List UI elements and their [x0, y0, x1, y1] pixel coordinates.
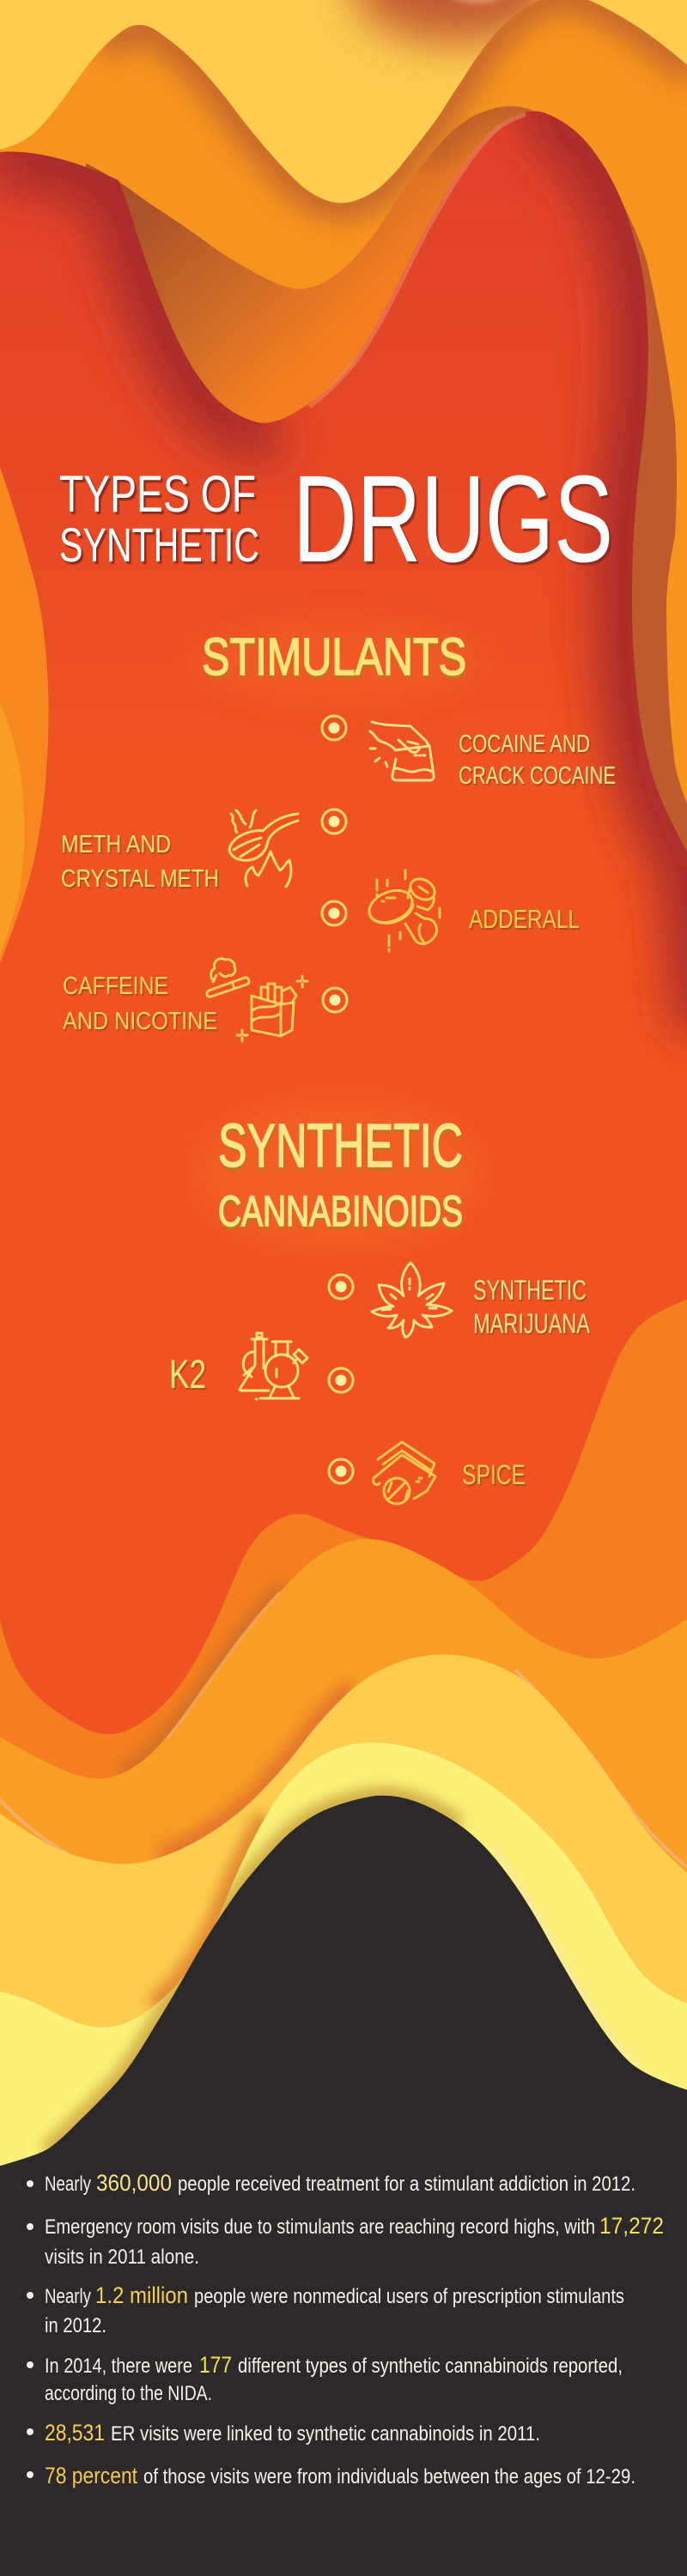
heading: synthetic cannabinoids: CANNABINOIDS: [218, 1187, 463, 1235]
bullet 4: cannabinoid types: different types of synthetic cannabinoids reported,: [238, 2355, 623, 2378]
bullet 3: nonmedical users: Nearly: [45, 2285, 91, 2308]
label: caffeine: AND NICOTINE: [63, 1008, 217, 1035]
marker: meth: [322, 809, 346, 833]
label: spice: SPICE: [462, 1459, 526, 1490]
label: caffeine: CAFFEINE: [63, 973, 168, 1000]
bullet 5: ER visits: 28,531: [45, 2420, 105, 2446]
label: k2: K2: [169, 1351, 206, 1397]
icon: cannabis leaf: [372, 1263, 452, 1337]
panel: stimulants list: [61, 716, 616, 1041]
label: adderall: ADDERALL: [469, 904, 580, 934]
bullet 1: treatment: 360,000: [96, 2170, 172, 2196]
label: meth: CRYSTAL METH: [61, 865, 219, 893]
bullet 4: cannabinoid types: In 2014, there were: [45, 2355, 192, 2378]
label: meth: METH AND: [61, 831, 171, 858]
marker: k2: [329, 1368, 353, 1392]
icon: glass bongs: [240, 1333, 307, 1399]
icon: cigarette and pack: [207, 959, 307, 1041]
panel: statistics list: [27, 2170, 664, 2488]
label: meth: [61, 831, 219, 893]
label: cocaine: CRACK COCAINE: [459, 762, 616, 790]
label: cocaine: COCAINE AND: [459, 730, 590, 758]
marker: synthetic marijuana: [329, 1275, 353, 1299]
bullet 5: ER visits: ER visits were linked to synthetic cannabinoids in 2011.: [111, 2422, 540, 2446]
icon: pills: [365, 870, 440, 951]
bullet 1: treatment: [27, 2170, 635, 2196]
bullet 6: ages: 78 percent: [45, 2463, 137, 2488]
label: synthetic marijuana: MARIJUANA: [473, 1308, 590, 1339]
label: synthetic marijuana: SYNTHETIC: [473, 1275, 587, 1306]
marker: cocaine: [322, 716, 346, 740]
heading: synthetic cannabinoids: SYNTHETIC: [218, 1112, 463, 1180]
label: cocaine: [459, 730, 616, 790]
bullet 2: emergency room visits: 17,272: [599, 2213, 664, 2239]
bullet 1: treatment: Nearly: [45, 2173, 91, 2196]
icon: spice packets with no-sign: [374, 1442, 435, 1504]
icon: hand and powder bag: [370, 722, 434, 780]
bullet 6: ages: [27, 2463, 635, 2488]
bullet 4: cannabinoid types: according to the NIDA.: [45, 2382, 212, 2405]
icon: spoon over flame: [229, 810, 298, 887]
label: caffeine: [63, 973, 217, 1035]
bullet 3: nonmedical users: [27, 2282, 624, 2337]
marker: spice: [329, 1459, 353, 1483]
bullet 5: ER visits: [27, 2420, 540, 2446]
title: TYPES OF: [59, 465, 256, 523]
marker: caffeine: [323, 988, 347, 1012]
bullet 2: emergency room visits: [27, 2213, 664, 2269]
bullet 2: emergency room visits: visits in 2011 alone.: [45, 2246, 199, 2269]
bullet 3: nonmedical users: in 2012.: [45, 2314, 106, 2337]
panel: cannabinoids list: [169, 1263, 590, 1504]
bullet 3: nonmedical users: 1.2 million: [95, 2282, 188, 2308]
heading: stimulants: STIMULANTS: [202, 627, 466, 686]
bullet 2: emergency room visits: Emergency room visits due to stimulants are reaching record highs, with: [45, 2215, 595, 2239]
heading: synthetic cannabinoids: [218, 1112, 463, 1235]
title: [59, 450, 613, 588]
marker: adderall: [322, 901, 346, 925]
label: synthetic marijuana: [473, 1275, 590, 1339]
title: SYNTHETIC: [59, 518, 259, 572]
bullet 4: cannabinoid types: 177: [199, 2352, 232, 2378]
bullet 4: cannabinoid types: [27, 2352, 623, 2405]
